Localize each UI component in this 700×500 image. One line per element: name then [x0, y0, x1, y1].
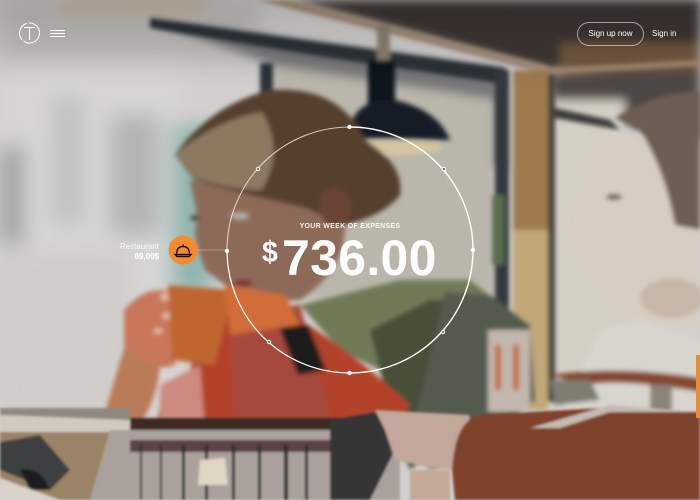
orange edge marker	[696, 355, 700, 418]
sign up button: Sign up now	[588, 29, 633, 38]
woman hair	[175, 90, 401, 225]
category label: restaurant: Restaurant	[120, 242, 159, 251]
sign up button	[577, 22, 644, 46]
arm, hand and cup	[90, 345, 160, 490]
car	[452, 408, 700, 500]
wheel	[550, 371, 700, 392]
bottom band	[0, 408, 130, 428]
icon: restaurant cloche	[168, 236, 198, 264]
hand	[375, 410, 470, 470]
right man	[568, 135, 700, 330]
total amount: $	[262, 236, 278, 269]
greenery	[300, 280, 495, 400]
heading: YOUR WEEK OF EXPENSES	[300, 223, 400, 230]
category label: restaurant: 89,00$	[135, 252, 159, 261]
woman face	[190, 180, 345, 300]
menu icon	[50, 30, 65, 37]
woman body	[158, 289, 410, 440]
sign in link: Sign in	[652, 29, 676, 38]
header logo	[19, 22, 40, 44]
lamp	[377, 25, 390, 60]
total amount: 736.00	[282, 230, 437, 286]
category label: restaurant	[120, 242, 159, 261]
